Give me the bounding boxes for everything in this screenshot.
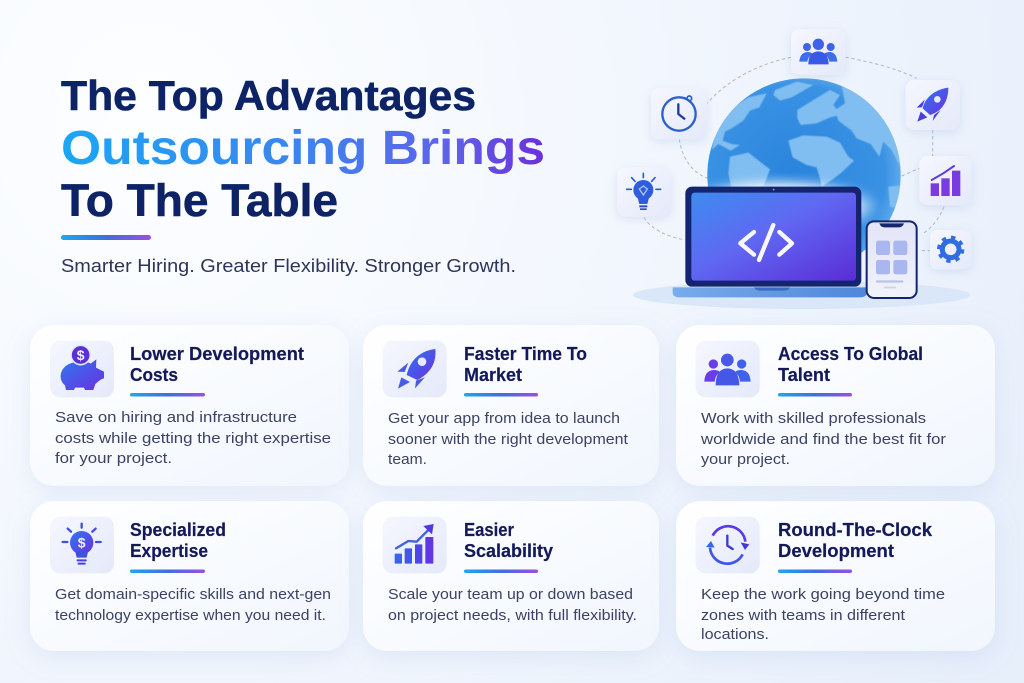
panel: lower development costs: Save on hiring and infrastructure	[55, 409, 297, 426]
phone	[867, 221, 917, 298]
icon tile: lightbulb	[617, 167, 671, 217]
panel: round-the-clock development: Keep the work going beyond time	[701, 586, 945, 603]
panel: access to global talent	[676, 325, 995, 486]
dashed connectors	[644, 57, 944, 251]
panel: specialized expertise: Get domain-specific skills and next-gen	[55, 586, 331, 603]
title: Outsourcing Brings	[61, 122, 545, 175]
panel: lower development costs: Costs	[130, 365, 178, 385]
icon: lightbulb with dollar	[50, 517, 114, 573]
panel: faster time to market: sooner with the right development	[388, 431, 629, 448]
panel: faster time to market: Market	[464, 365, 522, 385]
icon: rising bar chart	[383, 517, 447, 573]
icon: rocket	[383, 341, 447, 397]
panel: specialized expertise: Expertise	[130, 541, 208, 561]
laptop	[673, 187, 867, 297]
panel: easier scalability	[363, 501, 659, 651]
panel: lower development costs: costs while getting the right expertise	[55, 430, 331, 447]
panel: easier scalability: Easier	[464, 520, 514, 540]
panel: access to global talent: Work with skilled professionals	[701, 410, 926, 427]
panel: faster time to market	[363, 325, 659, 486]
panel: specialized expertise: technology expertise when you need it.	[55, 607, 326, 624]
panel: easier scalability: Scalability	[464, 541, 553, 561]
title: To The Table	[61, 175, 338, 226]
icon: piggy bank: $	[77, 347, 85, 363]
panel: faster time to market: Get your app from idea to launch	[388, 410, 620, 427]
title accent rule	[61, 235, 151, 240]
panel: round-the-clock development: Development	[778, 541, 894, 561]
icon: clock with cycle arrows	[696, 517, 760, 573]
panel: lower development costs: Lower Development	[130, 344, 304, 364]
panel: easier scalability: Scale your team up or down based	[388, 586, 633, 603]
icon: lightbulb with dollar: $	[78, 535, 86, 551]
panel: round-the-clock development: locations.	[701, 626, 769, 643]
panel: lower development costs: for your project.	[55, 450, 172, 467]
ground shadow	[633, 281, 970, 309]
panel: access to global talent: worldwide and find the best fit for	[700, 431, 946, 448]
icon tile: rocket	[906, 80, 960, 130]
icon: piggy bank	[50, 341, 114, 397]
panel: faster time to market: team.	[388, 451, 427, 468]
panel: easier scalability: on project needs, with full flexibility.	[388, 607, 637, 624]
panel: specialized expertise: Specialized	[130, 520, 226, 540]
panel: round-the-clock development	[676, 501, 995, 651]
panel: round-the-clock development: zones with teams in different	[701, 607, 906, 624]
icon: team	[696, 341, 760, 397]
panel: faster time to market: Faster Time To	[464, 344, 587, 364]
panel: lower development costs	[30, 325, 349, 486]
title: The Top Advantages	[61, 72, 476, 119]
code symbol	[740, 225, 792, 260]
icon tile: growth chart	[919, 156, 972, 205]
globe	[707, 78, 901, 253]
icon tile: gear	[930, 230, 972, 269]
icon tile: people	[791, 29, 846, 75]
panel: round-the-clock development: Round-The-Clock	[778, 520, 933, 540]
illustration: globe, laptop, phone and floating icons	[617, 29, 972, 309]
subtitle: Smarter Hiring. Greater Flexibility. Stronger Growth.	[61, 255, 516, 276]
icon tile: stopwatch	[651, 88, 707, 139]
panel: specialized expertise	[30, 501, 349, 651]
panel: access to global talent: your project.	[701, 451, 790, 468]
title	[61, 72, 545, 226]
panel: access to global talent: Talent	[778, 365, 830, 385]
panel: access to global talent: Access To Global	[778, 344, 923, 364]
